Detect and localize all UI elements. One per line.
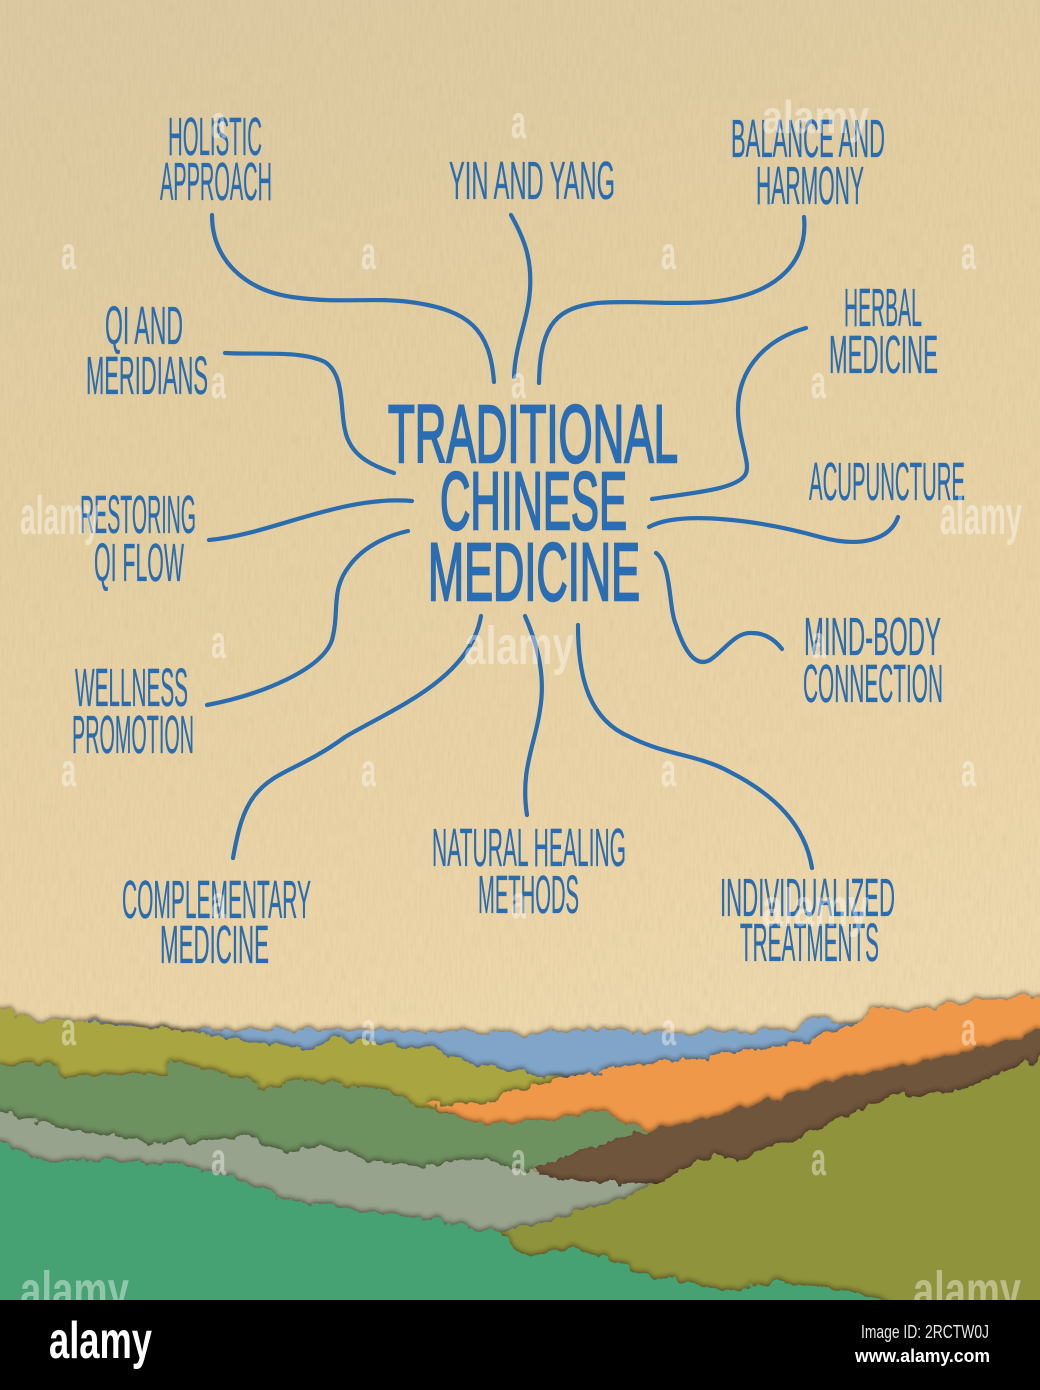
connector: balance and harmony — [539, 217, 804, 383]
connector: yin and yang — [511, 215, 530, 377]
layer: green-grey paper — [0, 1060, 647, 1190]
label: wellness promotion — [72, 658, 194, 765]
text: NATURAL HEALING — [432, 818, 626, 878]
layer: orange paper — [428, 996, 1040, 1145]
website: www.alamy.com — [854, 1346, 990, 1366]
layer: green paper — [0, 1136, 905, 1312]
label: complementary medicine — [122, 870, 311, 975]
layer: brown paper — [530, 1030, 1040, 1210]
watermarks: a — [211, 356, 226, 408]
connector: restoring qi flow — [209, 500, 412, 540]
text: YIN AND YANG — [449, 151, 615, 211]
label: individualized treatments — [720, 868, 895, 973]
label: natural healing methods — [432, 818, 626, 925]
watermarks: a — [511, 96, 526, 148]
watermarks: alamy — [762, 878, 869, 938]
title — [388, 389, 678, 618]
label: restoring qi flow — [80, 485, 196, 593]
watermarks: alamy — [20, 1261, 129, 1321]
text: HOLISTIC — [168, 107, 262, 167]
text: WELLNESS — [75, 658, 188, 718]
connector: mind-body connection — [656, 553, 782, 662]
connector: acupuncture — [649, 517, 898, 542]
connector: individualized treatments — [578, 625, 812, 868]
layer: olive paper — [497, 1052, 1040, 1310]
watermarks: a — [811, 356, 826, 408]
label: complementary medicine: MEDICINE — [160, 915, 269, 975]
text: APPROACH — [160, 152, 272, 212]
label: qi and meridians: QI AND — [105, 296, 183, 356]
connector: natural healing methods — [525, 616, 542, 815]
watermarks: a — [511, 356, 526, 408]
watermarks: a — [961, 744, 976, 796]
title: TRADITIONAL — [388, 389, 678, 480]
watermarks: alamy — [20, 486, 100, 546]
label: balance and harmony — [731, 109, 885, 216]
watermarks: a — [811, 1133, 826, 1185]
connector: qi and meridians — [225, 353, 394, 473]
text: MERIDIANS — [86, 346, 208, 406]
footer logo: alamy — [49, 1312, 152, 1370]
watermarks: a — [211, 616, 226, 668]
watermarks: a — [211, 876, 226, 928]
text: RESTORING — [80, 485, 196, 545]
image id: Image ID: 2RCTW0J — [861, 1322, 989, 1342]
watermarks: alamy — [762, 91, 869, 143]
connector: herbal medicine — [652, 328, 806, 499]
text: PROMOTION — [72, 705, 194, 765]
watermarks: a — [361, 1003, 376, 1055]
watermarks: alamy — [464, 616, 574, 676]
footer bar — [0, 1300, 1040, 1390]
watermarks: a — [61, 227, 76, 279]
layer: yellow-olive paper — [0, 1006, 590, 1140]
layer: grey paper — [0, 1108, 720, 1255]
mind map connectors — [207, 215, 898, 868]
panel: torn paper landscape — [0, 996, 1040, 1312]
watermarks: a — [61, 1003, 76, 1055]
watermarks: a — [211, 1133, 226, 1185]
watermarks: a — [961, 227, 976, 279]
watermarks: a — [361, 227, 376, 279]
title: CHINESE — [440, 456, 627, 547]
watermarks: a — [361, 744, 376, 796]
watermarks: a — [661, 227, 676, 279]
label: holistic approach — [160, 107, 272, 212]
watermarks: a — [811, 616, 826, 668]
watermarks: a — [511, 876, 526, 928]
label: natural healing methods: METHODS — [478, 865, 579, 925]
connector: holistic approach — [212, 215, 494, 382]
watermarks: a — [661, 744, 676, 796]
connector: wellness promotion — [207, 531, 408, 705]
title: MEDICINE — [428, 527, 640, 618]
watermarks: a — [61, 744, 76, 796]
watermarks: a — [511, 1133, 526, 1185]
watermarks: a — [661, 1003, 676, 1055]
text: HARMONY — [756, 156, 864, 216]
label: herbal medicine — [829, 278, 938, 385]
label: mind-body connection — [803, 607, 943, 714]
watermarks: a — [211, 96, 226, 148]
label: qi and meridians — [86, 296, 208, 406]
layer: blue paper — [86, 1018, 880, 1100]
text: QI FLOW — [94, 533, 184, 593]
connector: complementary medicine — [233, 616, 481, 858]
text: COMPLEMENTARY — [122, 870, 311, 930]
watermarks: a — [961, 1003, 976, 1055]
